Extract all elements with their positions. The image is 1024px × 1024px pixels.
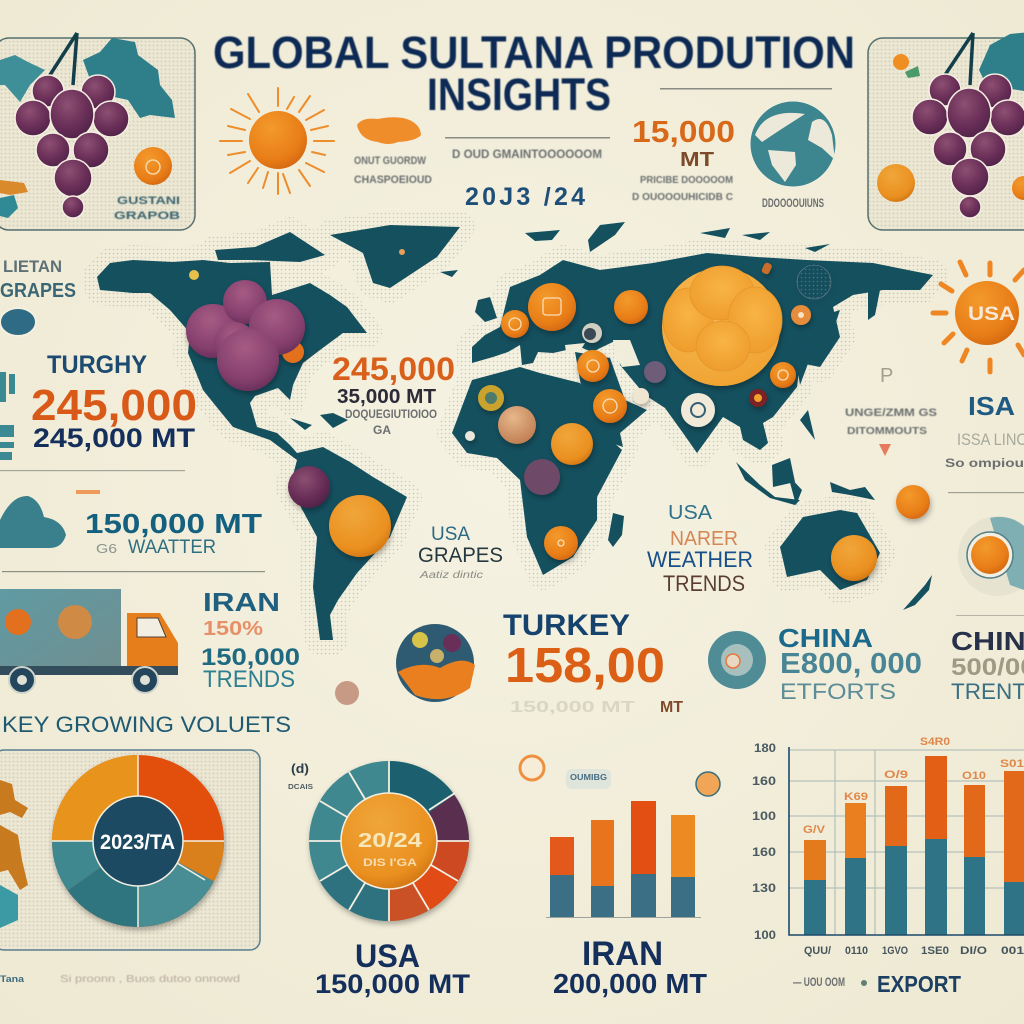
- Iran total: 200,000 MT: [553, 968, 707, 999]
- x axis labels: 1GVO: [882, 945, 908, 957]
- South America fruit: [288, 466, 391, 557]
- bar chart: export: [752, 736, 1024, 997]
- China stat right: [951, 626, 1024, 704]
- caption: D OUOOOUHICIDB C: [632, 192, 733, 203]
- stat block: top centre left: [354, 117, 432, 186]
- icon: orange gauge: [956, 516, 1024, 616]
- label: weather trends: TRENDS: [663, 571, 745, 596]
- donut centre: [93, 796, 183, 886]
- mid-right note: [845, 365, 937, 456]
- mid-right note: DITOMMOUTS: [847, 426, 927, 437]
- legend: [793, 971, 961, 997]
- bar value labels: S4R0: [920, 736, 950, 748]
- title: GLOBAL SULTANA PRODUTION: [213, 27, 855, 78]
- bars: teal: [804, 839, 1024, 935]
- small map caption: [345, 407, 437, 437]
- label: USA grapes: Aatiz dintic: [419, 570, 483, 581]
- footnote: Tana: [0, 974, 25, 984]
- label: GUSTANI: [117, 195, 180, 207]
- bar value labels: O10: [962, 770, 986, 782]
- icon: grape bunch: [15, 75, 129, 218]
- left column: weather stat: 150,000 MT: [85, 508, 262, 539]
- x axis labels: 1SE0: [921, 945, 949, 957]
- marker glyphs: [509, 298, 788, 546]
- globe caption: DDOOOOUIUNS: [762, 196, 824, 210]
- icon: left badge: [520, 756, 544, 780]
- donut chart 20/24: 20/24: [358, 830, 423, 852]
- USA total: [315, 938, 471, 999]
- caption: [632, 175, 733, 203]
- label: USA grapes: USA: [431, 524, 470, 545]
- note: (d): [291, 761, 309, 776]
- panel: donut chart 2023/24: 2023/TA: [100, 831, 175, 854]
- Iran stat: [201, 587, 300, 693]
- Iran total: [553, 935, 707, 999]
- icon: small disc: [0, 308, 36, 336]
- mid-right note: P: [880, 365, 893, 387]
- label pill: [566, 769, 611, 789]
- USA total: USA: [355, 938, 420, 974]
- right column stat: ISA: [945, 391, 1024, 493]
- stat: mid Atlantic 245,000: [332, 351, 455, 408]
- number: 245,000: [31, 381, 197, 430]
- left column: grapes label: [0, 257, 76, 336]
- unit: MT: [680, 149, 714, 171]
- bar value labels: K69: [844, 791, 868, 803]
- y axis labels: 160: [752, 845, 776, 859]
- Turkey callout: TURKEY: [503, 609, 630, 642]
- icon: oranges: [877, 164, 915, 202]
- bars: orange: [804, 756, 1024, 882]
- label: USA grapes: GRAPES: [418, 544, 503, 567]
- map marker fruits: [465, 262, 930, 581]
- left column: Turkey stat: TURGHY: [47, 351, 147, 379]
- icon: grape leaf: [979, 32, 1024, 92]
- number: 15,000: [632, 114, 735, 149]
- panel: grapes top left: [0, 33, 195, 230]
- small map caption: GA: [373, 423, 391, 437]
- right column stat: ISA: ISA: [968, 391, 1015, 421]
- icon: small tan ball: [335, 681, 359, 705]
- icon: USA sun badge: [933, 262, 1024, 372]
- legend: EXPORT: [877, 971, 961, 997]
- Iran total: IRAN: [582, 935, 663, 973]
- stat: mid Atlantic 245,000: 35,000 MT: [337, 386, 436, 408]
- donut chart 20/24: DIS I'GA: [363, 857, 417, 869]
- bar value labels: O/9: [884, 769, 908, 781]
- China stat: CHINA: [778, 623, 873, 653]
- footnote: [0, 974, 240, 985]
- footnote: Si proonn , Buos dutoo onnowd: [60, 974, 240, 985]
- icon: sun: [220, 88, 334, 194]
- label pill: OUMIBG: [570, 773, 607, 782]
- icon: globe: [750, 101, 836, 187]
- grape cluster on North America: [186, 280, 305, 391]
- right column stat: ISA: So ompiou: [945, 456, 1024, 470]
- caption: [354, 155, 432, 186]
- x axis labels: 0110: [845, 945, 868, 957]
- y axis labels: [752, 741, 776, 942]
- y axis labels: 100: [752, 809, 776, 823]
- left column: grapes label: GRAPES: [0, 280, 76, 302]
- China stat: [778, 623, 922, 704]
- label: GRAPOB: [114, 210, 180, 222]
- left column: Turkey stat: [0, 351, 197, 471]
- Turkey callout: MT: [660, 699, 683, 716]
- stat: 15,000 MT: [632, 88, 832, 203]
- caption: ONUT GUORDW: [354, 155, 427, 167]
- caption: D OUD GMAINTOOOOOOM: [452, 147, 602, 161]
- x axis labels: 001: [1001, 945, 1024, 957]
- world map: [97, 222, 933, 640]
- icon: grape stems: [48, 33, 77, 85]
- Iran stat: TRENDS: [203, 666, 295, 693]
- Iran stat: 150%: [203, 618, 263, 640]
- Turkey callout: 150,000 MT: [510, 699, 635, 716]
- donut chart 20/24: DCAIS: [288, 784, 313, 791]
- left column: grapes label: LIETAN: [3, 257, 62, 276]
- y axis labels: 130: [752, 881, 776, 895]
- Turkey callout: 158,00: [505, 639, 665, 693]
- unit line: 245,000 MT: [33, 423, 196, 453]
- left column: weather stat: [0, 492, 265, 572]
- Iran stat: 150,000: [201, 644, 300, 671]
- x axis labels: DI/O: [960, 945, 988, 957]
- donut: [72, 776, 204, 906]
- icon: orange blob: [357, 117, 421, 144]
- Turkey callout: [503, 609, 683, 716]
- label: weather trends: NARER: [670, 528, 738, 550]
- left column: weather stat: WAATTER: [128, 537, 216, 558]
- USA total: 150,000 MT: [315, 969, 471, 999]
- icon: orange sultana: [134, 147, 172, 185]
- icon: cloud: [0, 496, 66, 548]
- China stat: ETFORTS: [780, 679, 896, 704]
- y axis labels: 160: [752, 774, 776, 788]
- caption: PRICIBE DOOOOOM: [640, 175, 733, 186]
- icon: farmer badge: [396, 624, 475, 702]
- year: 20J3 /24: [465, 183, 585, 211]
- y axis labels: 180: [754, 741, 776, 755]
- icon: right badge: [696, 772, 720, 796]
- small map caption: DOQUEGIUTIOIOO: [345, 407, 437, 421]
- label: USA grapes: [418, 524, 503, 581]
- x axis labels: [804, 945, 1024, 957]
- icon: delivery truck: [0, 589, 178, 693]
- bar chart: small: [520, 756, 720, 918]
- section heading: KEY GROWING VOLUETS: [2, 712, 291, 737]
- y axis labels: 100: [754, 928, 776, 942]
- caption: CHASPOEIOUD: [354, 174, 432, 186]
- label: weather trends: WEATHER: [647, 547, 753, 572]
- China stat: E800, 000: [780, 648, 922, 680]
- icon: grape stems: [945, 33, 973, 85]
- axes: [789, 747, 1024, 935]
- panel: donut chart 2023/24: [0, 750, 260, 950]
- legend: — UOU OOM: [793, 975, 845, 989]
- mid-right note: UNGE/ZMM GS: [845, 407, 937, 419]
- title: INSIGHTS: [427, 69, 611, 120]
- donut chart 20/24: [288, 761, 469, 921]
- panel: grapes top right: [868, 32, 1024, 230]
- label: weather trends: USA: [668, 502, 713, 524]
- icon: teal blocks: [0, 372, 15, 460]
- icon: USA sun badge: USA: [968, 304, 1015, 325]
- bar value labels: G/V: [803, 824, 826, 836]
- icon: grape bunch: [912, 74, 1024, 218]
- label: weather trends: [647, 502, 753, 596]
- x axis labels: QUU/: [804, 945, 831, 957]
- label: [114, 195, 180, 222]
- decorative map fragment: [0, 780, 28, 890]
- bar value labels: [803, 736, 1024, 836]
- icon: grape leaf: [83, 38, 175, 118]
- large central fruit: [662, 266, 782, 386]
- China icon: [708, 631, 766, 689]
- bar value labels: S01: [1000, 758, 1024, 770]
- grid: [789, 750, 1024, 935]
- title: [213, 27, 855, 120]
- season label: [445, 137, 610, 211]
- Iran stat: IRAN: [203, 587, 280, 617]
- left column: weather stat: G6: [96, 541, 117, 556]
- donut centre: [341, 793, 437, 889]
- stat: mid Atlantic 245,000: 245,000: [332, 351, 455, 387]
